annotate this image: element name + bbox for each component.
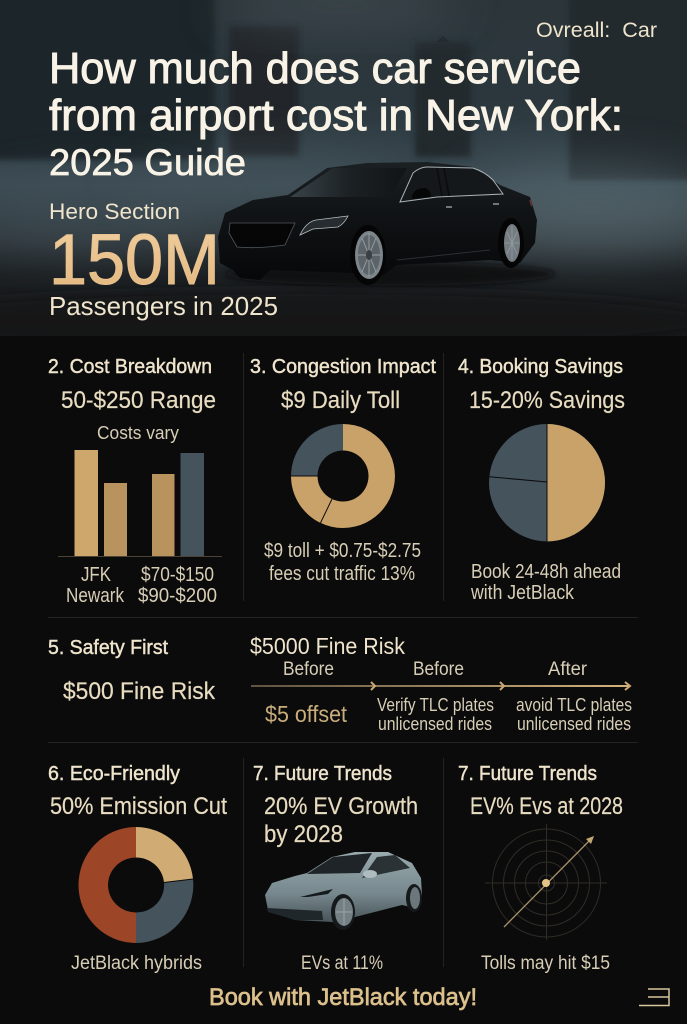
heading: 7. Future Trends	[253, 763, 392, 785]
caption	[264, 540, 421, 585]
hero label: overall: Ovreall: Car	[536, 19, 657, 42]
caption: Tolls may hit $15	[481, 953, 610, 974]
heading: 3. Congestion Impact	[250, 356, 436, 378]
pie chart	[489, 424, 605, 541]
stat: 15-20% Savings	[469, 387, 625, 414]
radar chart with arrow	[485, 824, 607, 940]
donut chart	[291, 424, 395, 528]
stat: 20% EV Growth	[264, 793, 418, 820]
stat: by 2028	[264, 821, 343, 848]
timeline notes: Verify TLC plates	[377, 695, 494, 715]
price labels: $90-$200	[138, 585, 217, 607]
icon: electric car	[265, 852, 422, 930]
timeline labels: Before	[283, 659, 334, 680]
panel: booking savings	[458, 356, 625, 604]
timeline labels: After	[548, 659, 588, 680]
heading: 7. Future Trends	[458, 763, 597, 785]
price labels: $70-$150	[141, 564, 214, 586]
big stat: 150M: 150M	[49, 221, 220, 300]
panel: cost breakdown	[48, 356, 222, 607]
stat: $9 Daily Toll	[281, 387, 400, 414]
note: Costs vary	[97, 423, 179, 443]
panel: eco-friendly	[48, 763, 227, 974]
hero city and fog background	[0, 0, 687, 350]
price labels	[66, 564, 217, 607]
caption: JetBlack hybrids	[71, 953, 202, 974]
stat: $500 Fine Risk	[63, 678, 216, 705]
timeline labels	[283, 659, 588, 680]
front wheel	[350, 225, 386, 285]
timeline notes: unlicensed rides	[517, 714, 631, 734]
timeline notes	[265, 695, 632, 734]
heading: 2. Cost Breakdown	[48, 356, 212, 378]
caption: $9 toll + $0.75-$2.75	[264, 540, 421, 562]
title: How much does car service	[49, 44, 581, 93]
icon: logo mark	[639, 989, 669, 1006]
stat	[264, 793, 418, 848]
heading: 5. Safety First	[48, 637, 168, 659]
timeline title: $5000 Fine Risk	[250, 633, 405, 659]
dividers	[48, 353, 638, 967]
title: 2025 Guide	[49, 142, 246, 183]
caption	[470, 561, 621, 604]
caption: with JetBlack	[470, 582, 575, 604]
panel: future trends EV growth	[253, 763, 422, 974]
stat: 50-$250 Range	[61, 387, 216, 414]
stat: 50% Emission Cut	[50, 793, 227, 820]
price labels: Newark	[66, 585, 125, 607]
stat: EV% Evs at 2028	[470, 793, 623, 820]
timeline notes: avoid TLC plates	[516, 695, 632, 715]
panel: safety first	[48, 633, 632, 734]
heading: 6. Eco-Friendly	[48, 763, 180, 785]
caption: Book 24-48h ahead	[471, 561, 621, 583]
price labels: JFK	[81, 564, 112, 586]
panel: hero section	[0, 0, 687, 350]
caption: fees cut traffic 13%	[269, 563, 415, 585]
call to action: Book with JetBlack today!	[209, 984, 477, 1011]
icon: black luxury sedan	[218, 162, 555, 286]
timeline notes: $5 offset	[265, 701, 348, 727]
rear wheel	[498, 218, 524, 268]
arrow: timeline	[251, 682, 630, 690]
hero section label: Hero Section	[49, 199, 180, 224]
caption: EVs at 11%	[301, 953, 383, 974]
panel: congestion impact	[250, 356, 436, 585]
title	[49, 44, 623, 183]
stat caption: Passengers in 2025	[49, 291, 278, 321]
title: from airport cost in New York:	[49, 91, 623, 140]
panel: future trends radar	[458, 763, 623, 974]
timeline notes: unlicensed rides	[378, 714, 492, 734]
heading: 4. Booking Savings	[458, 356, 623, 378]
donut chart	[78, 827, 193, 943]
timeline labels: Before	[413, 659, 464, 680]
bar chart	[58, 450, 222, 557]
